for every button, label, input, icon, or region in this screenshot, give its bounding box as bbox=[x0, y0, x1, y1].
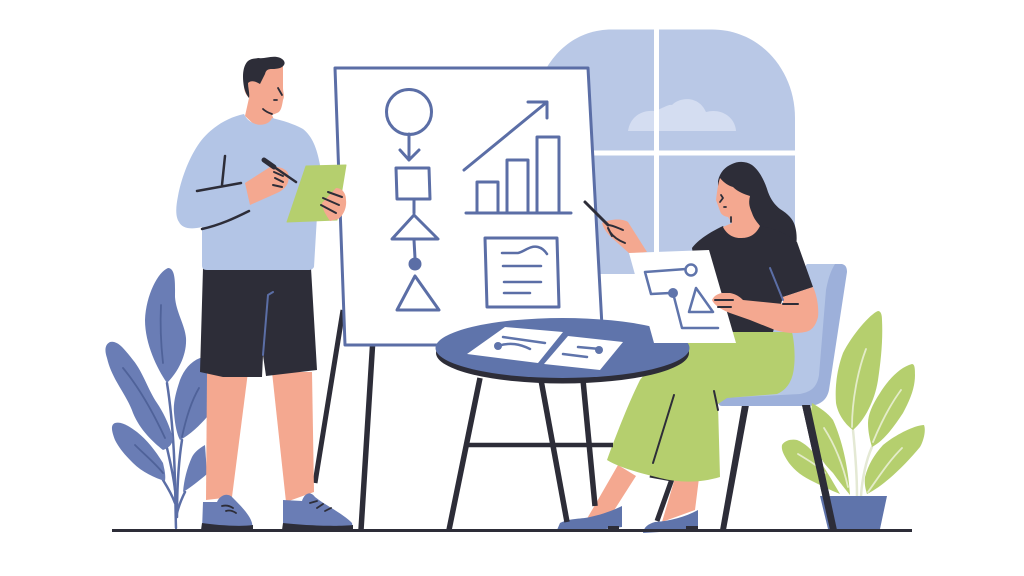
cloud bbox=[628, 99, 736, 131]
flow diagram bbox=[386, 90, 439, 310]
man sweater bbox=[176, 114, 320, 270]
woman black shirt bbox=[692, 226, 813, 332]
woman shoes bbox=[557, 506, 698, 533]
pointer and fingers bbox=[585, 202, 625, 243]
flip chart board bbox=[335, 68, 603, 345]
man bbox=[176, 57, 353, 530]
blue veins bbox=[123, 305, 199, 473]
plant: green right bbox=[782, 311, 925, 530]
woman upper body bbox=[585, 162, 818, 343]
table paper left bbox=[467, 327, 563, 363]
chair legs bbox=[720, 405, 837, 530]
woman calves bbox=[585, 465, 699, 522]
window bbox=[535, 29, 796, 275]
man shorts bbox=[200, 268, 317, 377]
chair bbox=[718, 264, 847, 530]
woman right arm and hand bbox=[712, 268, 818, 333]
man hair bbox=[243, 57, 285, 98]
chair leg behind skirt bbox=[650, 475, 672, 521]
bar chart with rising arrow bbox=[464, 102, 571, 213]
table legs bbox=[449, 378, 613, 530]
man shoes bbox=[201, 493, 353, 530]
man right hand bbox=[321, 188, 346, 221]
man legs bbox=[206, 372, 314, 502]
green veins bbox=[798, 349, 902, 492]
ground line bbox=[112, 529, 912, 532]
document card bbox=[485, 238, 559, 307]
plant pot bbox=[820, 496, 887, 529]
green leaves bbox=[782, 311, 925, 495]
blue stems bbox=[163, 383, 185, 528]
table bbox=[436, 318, 690, 530]
blue leaves bbox=[105, 268, 207, 492]
woman left arm bbox=[602, 219, 647, 254]
woman face and neck bbox=[716, 178, 760, 238]
held paper bbox=[629, 250, 736, 343]
woman facial details bbox=[720, 195, 731, 222]
table paper right bbox=[544, 336, 623, 370]
green skirt bbox=[607, 332, 795, 482]
easel back legs bbox=[315, 310, 373, 530]
green stems bbox=[853, 430, 872, 496]
green clipboard bbox=[287, 165, 346, 222]
woman hair back bbox=[718, 162, 797, 246]
man hand with pen bbox=[245, 160, 296, 205]
woman back leg and legs bbox=[557, 332, 795, 533]
chair leg front of pot bbox=[802, 405, 837, 530]
plant: blue left bbox=[105, 268, 207, 528]
man neck and face bbox=[243, 57, 285, 130]
